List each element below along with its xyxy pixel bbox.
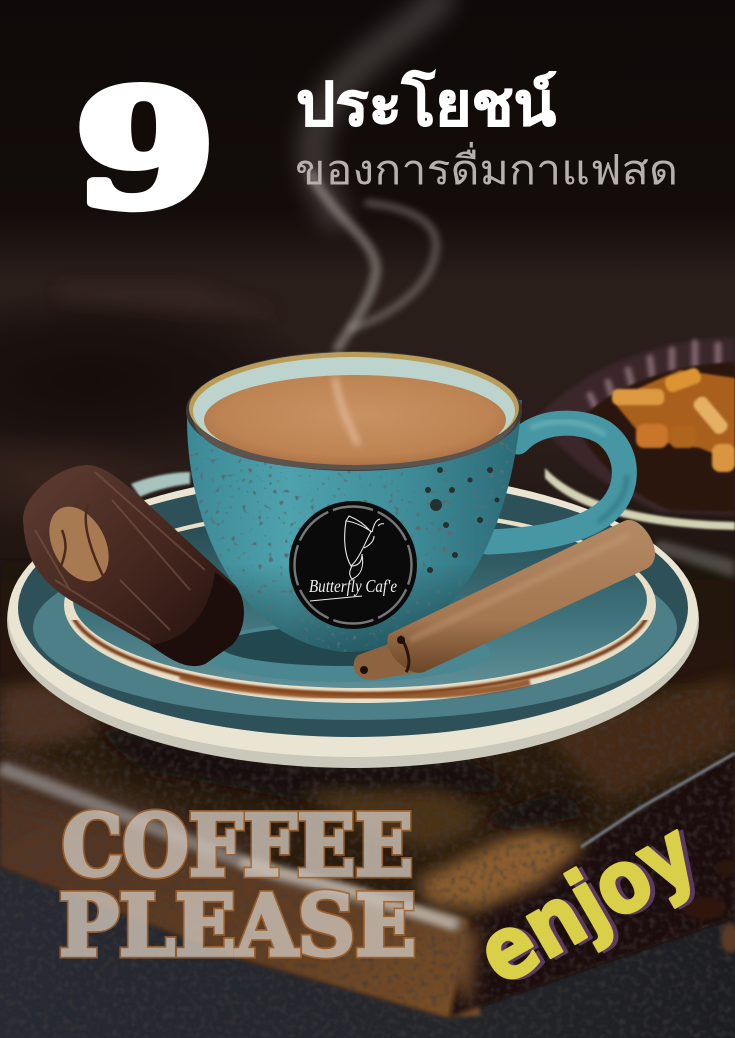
steam bbox=[312, 0, 440, 348]
plate rust bottom band bbox=[180, 676, 530, 696]
pastry base bbox=[575, 362, 735, 512]
nut topping bbox=[612, 366, 735, 472]
word: please outline: PLEASE bbox=[59, 876, 416, 975]
table surface bbox=[0, 840, 735, 1038]
coffee please heading bbox=[59, 796, 416, 975]
coffee beans on table bbox=[682, 860, 735, 953]
logo script text: Butterfly Caf'e bbox=[309, 576, 397, 596]
enjoy lettering: enjoy bbox=[461, 802, 712, 1005]
board grain bbox=[0, 690, 735, 1020]
cup dark dots right bbox=[425, 467, 500, 573]
plate rust rim bbox=[70, 620, 650, 696]
background lower left glow bbox=[0, 430, 180, 530]
background left shade bbox=[0, 290, 330, 470]
coffee cup bbox=[180, 351, 525, 655]
board edge highlight bright bbox=[240, 862, 455, 925]
small stick bbox=[354, 640, 420, 680]
right background reflection bbox=[650, 540, 735, 578]
pastry pleats bbox=[590, 343, 718, 408]
board edge highlight left bbox=[0, 768, 460, 925]
chocolate nut decoration bbox=[37, 496, 121, 592]
cup speckles bbox=[180, 440, 525, 655]
cinnamon stick bbox=[354, 520, 655, 680]
chocolate roll bbox=[23, 465, 244, 666]
title: ประโยชน์ bbox=[296, 69, 557, 138]
word: please fill: PLEASE bbox=[59, 876, 416, 975]
plate rim bbox=[545, 468, 735, 530]
cinnamon end dark marks bbox=[400, 636, 409, 672]
cup body bbox=[187, 400, 522, 652]
plate inner rings bbox=[200, 622, 490, 682]
dessert plate bbox=[535, 338, 735, 530]
board texture patches bbox=[0, 675, 735, 1010]
cup rim bbox=[186, 351, 522, 471]
logo ring bbox=[294, 506, 412, 624]
big saucer bbox=[7, 471, 699, 768]
chocolate stripes bbox=[35, 472, 205, 640]
butterfly icon bbox=[345, 516, 384, 579]
pastry cup bbox=[535, 338, 735, 515]
saucer middle ring bbox=[33, 536, 677, 720]
wooden board bbox=[0, 640, 735, 1020]
rim inner shade bbox=[193, 418, 518, 470]
board right dark side bbox=[450, 753, 735, 1017]
subtitle: ของการดื่มกาแฟสด bbox=[295, 142, 678, 193]
board left side face bbox=[0, 765, 480, 1017]
coffee surface bbox=[204, 375, 506, 465]
number 9: 9 bbox=[75, 55, 215, 243]
logo: Butterfly Cafe bbox=[289, 501, 417, 629]
cup handle bbox=[488, 422, 627, 542]
board edge highlight right bbox=[581, 753, 735, 847]
small plate bbox=[64, 507, 656, 703]
table grain bbox=[0, 840, 735, 1038]
word: coffee fill: COFFEE bbox=[62, 796, 413, 895]
chocolate end dark bbox=[150, 572, 244, 666]
background soft band bbox=[60, 285, 280, 312]
word: coffee outline: COFFEE bbox=[62, 796, 413, 895]
saucer back rim bbox=[131, 472, 190, 497]
